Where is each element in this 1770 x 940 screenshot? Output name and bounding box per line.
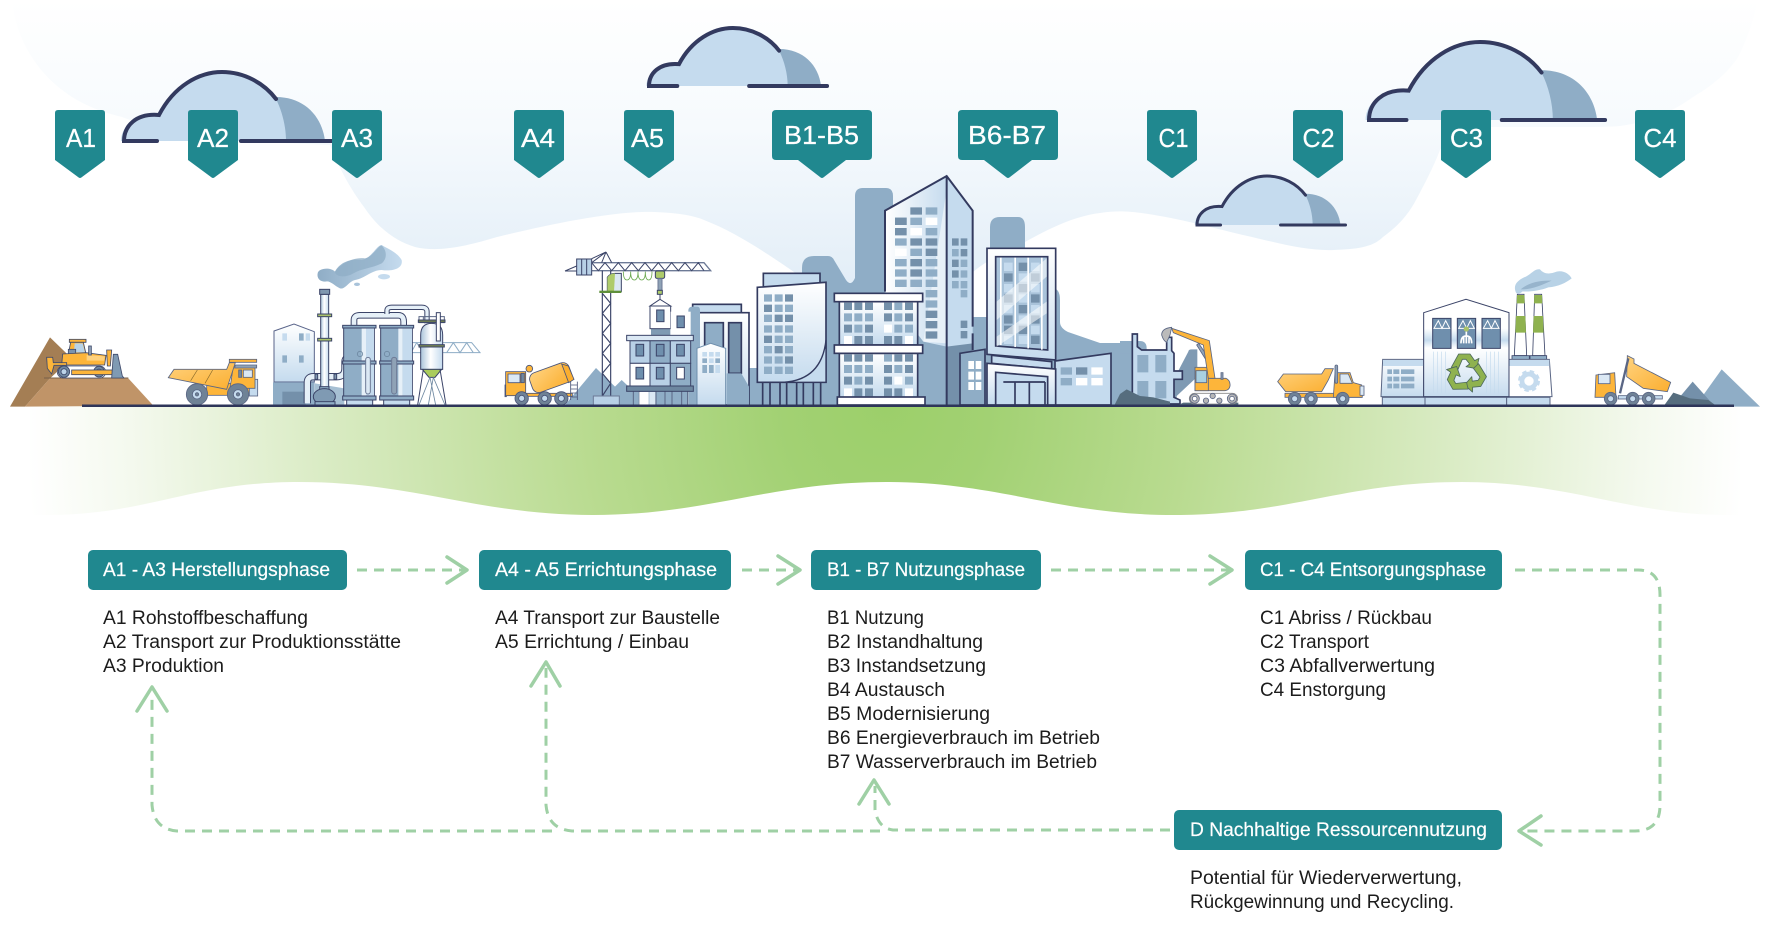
text: A4-A5 list: [495, 608, 720, 653]
text: D description: Potential für Wiederverwertung,: [1190, 868, 1462, 889]
phase heading: C1-C4: [1245, 550, 1502, 590]
text: B1-B7 list: [827, 608, 1100, 773]
text: A1-A3 list: A1 Rohstoffbeschaffung: [103, 608, 308, 629]
cloud: A2: [121, 72, 332, 141]
text: A1-A3 list: A2 Transport zur Produktionsstätte: [103, 632, 401, 653]
marker C3: [1441, 110, 1491, 178]
marker A2: A2: [197, 123, 229, 153]
ground: green gradient band: [30, 406, 1740, 515]
marker C4: C4: [1644, 123, 1676, 153]
glass tower: [987, 248, 1056, 405]
ruined building backdrop: [1114, 334, 1197, 406]
text: C1-C4 list: C2 Transport: [1260, 632, 1370, 653]
smoke: [1515, 269, 1572, 294]
arrow: D back to A4-A5: [531, 662, 880, 831]
icon: gear: [1519, 371, 1539, 391]
dirt pile: [10, 337, 153, 407]
marker C4: [1635, 110, 1685, 178]
chimneys: [1512, 294, 1547, 360]
illustration: city buildings B1-B7: [750, 176, 1111, 405]
marker B6-B7: B6-B7: [968, 120, 1046, 150]
marker B1-B5: [772, 110, 872, 178]
marker C2: C2: [1302, 123, 1334, 153]
silo: [418, 313, 446, 405]
back building: [688, 304, 749, 405]
mounds: [1664, 369, 1760, 407]
text: B1-B7 list: B3 Instandsetzung: [827, 656, 986, 677]
text: C1-C4 list: C4 Enstorgung: [1260, 680, 1386, 701]
tipper truck: [1278, 365, 1364, 405]
marker A3: A3: [341, 123, 373, 153]
phase heading: A1-A3: A1 - A3 Herstellungsphase: [103, 560, 330, 581]
phase heading: A4-A5: [479, 550, 731, 590]
illustration: recycling plant C3 and dump truck C4: [1381, 269, 1760, 407]
marker A4: A4: [521, 123, 555, 153]
text: A1-A3 list: [103, 608, 401, 677]
text: B1-B7 list: B2 Instandhaltung: [827, 632, 983, 653]
marker C1: C1: [1158, 123, 1188, 153]
smoke: [317, 245, 402, 289]
curved building: [750, 273, 826, 405]
text: A1-A3 list: A3 Produktion: [103, 656, 224, 677]
phase heading: A1-A3: [88, 550, 347, 590]
city skyline silhouette: [747, 188, 1145, 406]
hills: [565, 368, 648, 405]
truss behind silo: [411, 343, 480, 353]
phase heading: D: D Nachhaltige Ressourcennutzung: [1190, 820, 1487, 841]
text: D description: [1190, 868, 1462, 913]
text: C1-C4 list: C1 Abriss / Rückbau: [1260, 608, 1432, 629]
arrow: C1-C4 to D: [1515, 570, 1660, 845]
illustration: bulldozer on dirt pile and mining truck: [10, 337, 258, 407]
dump truck: [1595, 356, 1671, 405]
phase heading: B1-B7: [811, 550, 1041, 590]
concrete mixer truck: [505, 361, 577, 405]
middle building: [834, 293, 925, 405]
text: B1-B7 list: B6 Energieverbrauch im Betrieb: [827, 728, 1100, 749]
phase heading: B1-B7: B1 - B7 Nutzungsphase: [827, 560, 1025, 581]
building under construction: [627, 299, 693, 405]
stack and pipes: [307, 289, 352, 405]
side wings: [1381, 359, 1552, 406]
marker B1-B5: B1-B5: [784, 120, 859, 150]
text: B1-B7 list: B5 Modernisierung: [827, 704, 990, 725]
main tower: [885, 176, 973, 405]
arrow: D back to A1-A3: [137, 687, 552, 831]
tanks: [343, 307, 427, 405]
phase heading: C1-C4: C1 - C4 Entsorgungsphase: [1260, 560, 1486, 581]
marker C2: [1293, 110, 1343, 178]
illustration: construction site A5: [505, 252, 749, 405]
arrow: B1-B7 to C1-C4: [1051, 556, 1232, 584]
phase heading: D: [1174, 810, 1502, 850]
ground line: [82, 404, 1734, 407]
text: C1-C4 list: C3 Abfallverwertung: [1260, 656, 1435, 677]
side building: [273, 324, 344, 405]
mining dump truck: [168, 359, 258, 405]
small left annex: [960, 349, 985, 405]
marker A3: [332, 110, 382, 178]
marker C3: C3: [1450, 123, 1483, 153]
marker A5: [624, 110, 674, 178]
text: B1-B7 list: B7 Wasserverbrauch im Betrieb: [827, 752, 1097, 773]
text: C1-C4 list: [1260, 608, 1435, 701]
crane: [565, 252, 711, 405]
marker A5: A5: [631, 123, 664, 153]
arrow: A4-A5 to B1-B7: [742, 556, 800, 584]
small right annex: [1055, 353, 1111, 405]
marker A1: [55, 110, 105, 178]
marker A4: [514, 110, 564, 178]
illustration: production plant A3: [273, 245, 480, 405]
text: A4-A5 list: A5 Errichtung / Einbau: [495, 632, 689, 653]
main hall: [1424, 299, 1509, 397]
marker A1: A1: [66, 123, 96, 153]
marker B6-B7: [958, 110, 1058, 178]
cloud: C3: [1366, 42, 1605, 120]
arrow: D back to B1-B7: [859, 780, 1170, 830]
phase heading: A4-A5: A4 - A5 Errichtungsphase: [495, 560, 717, 581]
text: B1-B7 list: B4 Austausch: [827, 680, 945, 701]
text: B1-B7 list: B1 Nutzung: [827, 608, 924, 629]
marker A2: [188, 110, 238, 178]
bulldozer: [47, 339, 124, 378]
sky background shape: [12, 0, 1758, 320]
icon: recycling symbol: [1443, 354, 1490, 396]
text: A4-A5 list: A4 Transport zur Baustelle: [495, 608, 720, 629]
illustration: demolition excavator C1 and transport truck C2: [1114, 327, 1364, 406]
marker C1: [1147, 110, 1197, 178]
excavator: [1162, 327, 1238, 406]
cloud: C2 small: [1195, 176, 1346, 225]
arrow: A1-A3 to A4-A5: [357, 557, 467, 583]
cloud: centre top: [646, 28, 827, 86]
text: D description: Rückgewinnung und Recycling.: [1190, 892, 1454, 913]
